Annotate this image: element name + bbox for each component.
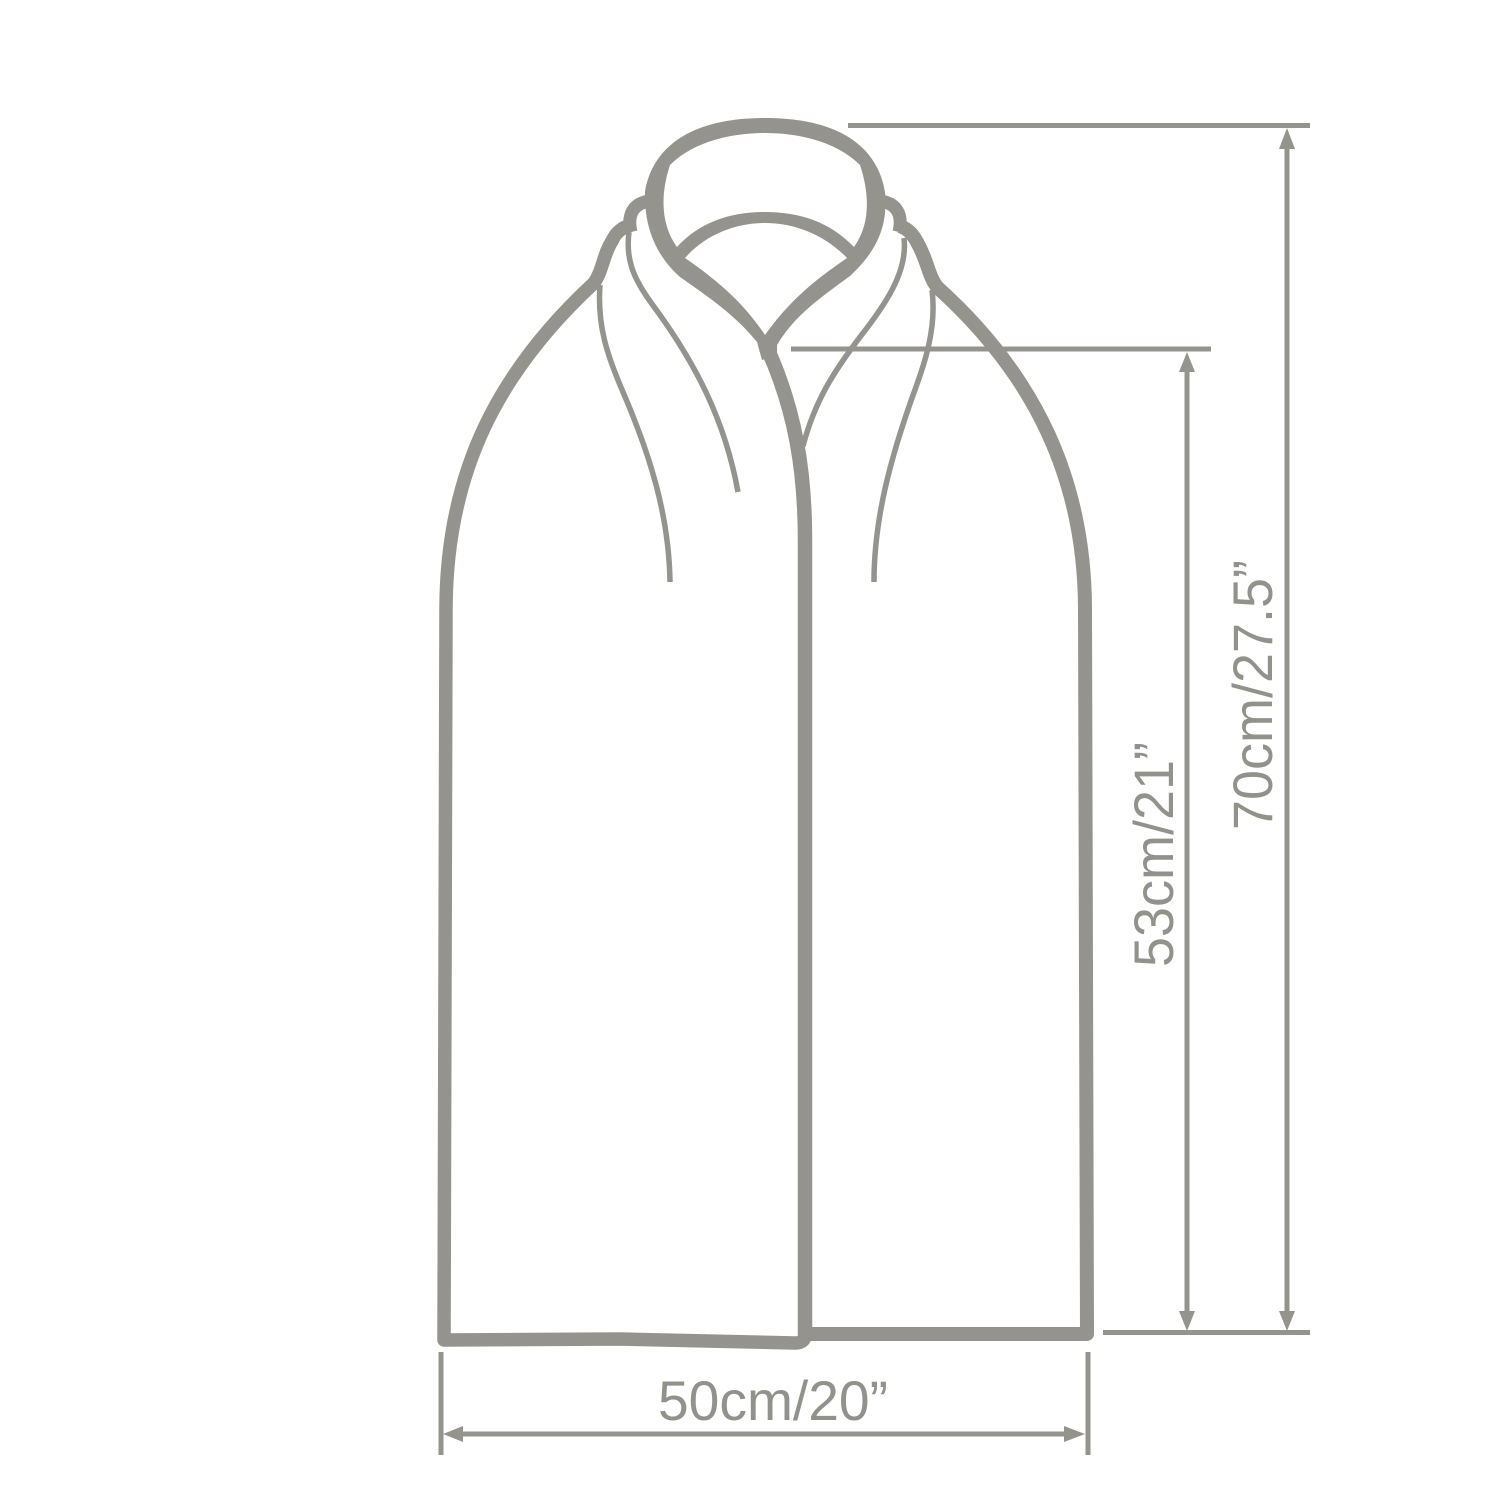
small left knot: [630, 201, 650, 232]
left outer edge, shoulder and hem: [444, 225, 805, 1343]
53cm arrow: [1179, 352, 1195, 1331]
bottom extension line: [1103, 1330, 1310, 1335]
scarf outline: [444, 201, 1087, 1343]
small right knot: [880, 201, 900, 232]
dimension: length 53cm: [791, 346, 1211, 1331]
collar: [645, 118, 886, 360]
dimension: length 70cm: [848, 123, 1310, 1335]
dimension: width 50cm: [441, 1352, 1088, 1455]
53cm label: 53cm/21”: [1122, 742, 1185, 967]
70cm top extension line: [848, 123, 1310, 128]
70cm arrow: [1279, 128, 1295, 1331]
thin fold lines: [599, 232, 933, 582]
centre edge: [768, 350, 805, 1338]
width arrow: [443, 1426, 1085, 1442]
right outer edge, shoulder and hem: [808, 226, 1087, 1334]
53cm top extension line: [791, 346, 1211, 352]
width label: 50cm/20”: [658, 1369, 888, 1432]
width extension lines: [441, 1352, 1088, 1455]
70cm label: 70cm/27.5”: [1221, 560, 1284, 830]
